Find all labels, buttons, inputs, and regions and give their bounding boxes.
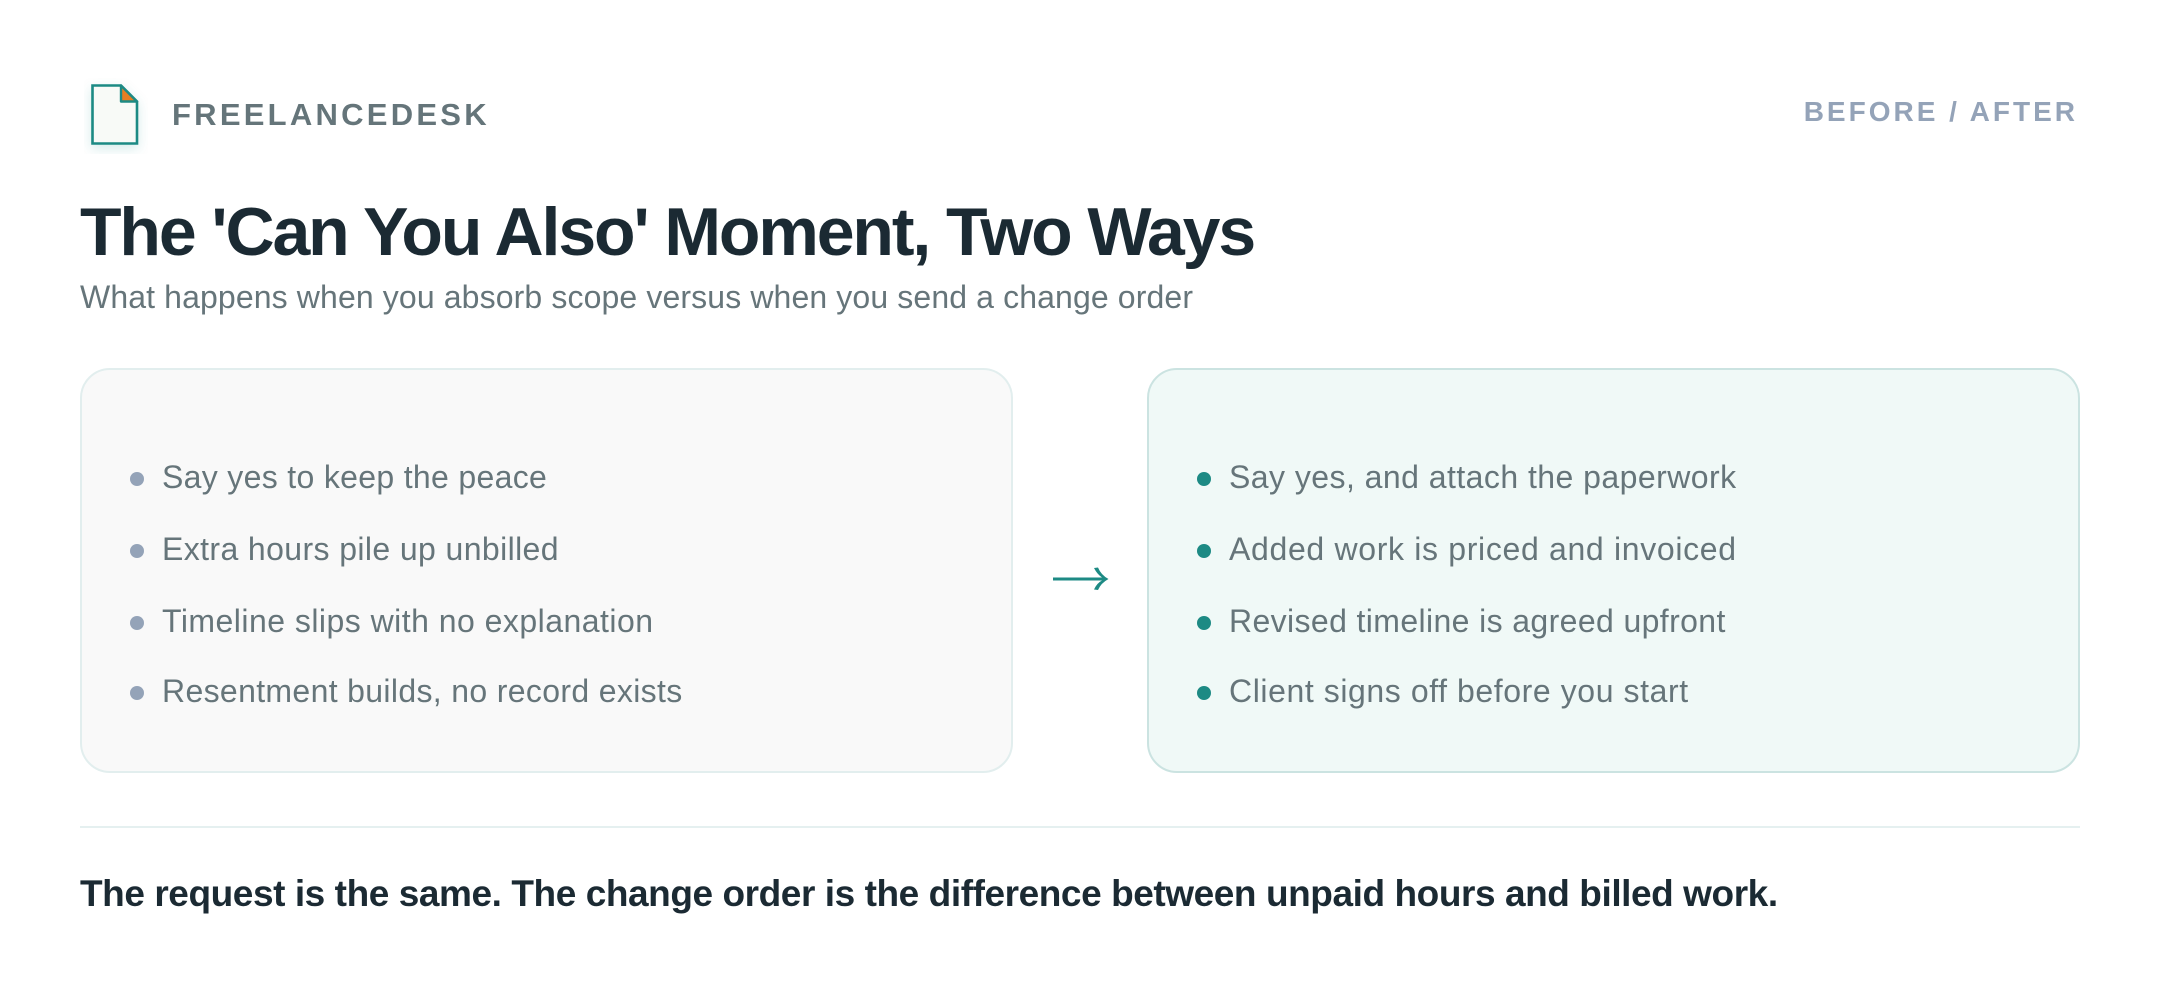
title: The 'Can You Also' Moment, Two Ways — [80, 194, 1254, 270]
after item 4: Client signs off before you start — [1229, 673, 1689, 709]
before item 4: Resentment builds, no record exists — [162, 673, 683, 709]
before item 2: Extra hours pile up unbilled — [162, 531, 559, 567]
panel: before — [80, 368, 1013, 773]
arrow: before to after — [1053, 568, 1108, 590]
panel: after — [1147, 368, 2080, 773]
logo: document icon — [86, 84, 143, 154]
after item 3: Revised timeline is agreed upfront — [1229, 603, 1726, 639]
before item 1: Say yes to keep the peace — [162, 459, 547, 495]
takeaway sentence: The request is the same. The change order is the difference between unpaid hours and billed work. — [80, 873, 1778, 914]
subtitle: What happens when you absorb scope versus when you send a change order — [80, 279, 1193, 315]
top right label: before / after: BEFORE / AFTER — [1804, 96, 2078, 127]
before item 3: Timeline slips with no explanation — [162, 603, 653, 639]
after item 1: Say yes, and attach the paperwork — [1229, 459, 1737, 495]
brand name: FREELANCEDESK — [172, 97, 490, 132]
after item 2: Added work is priced and invoiced — [1229, 531, 1737, 567]
